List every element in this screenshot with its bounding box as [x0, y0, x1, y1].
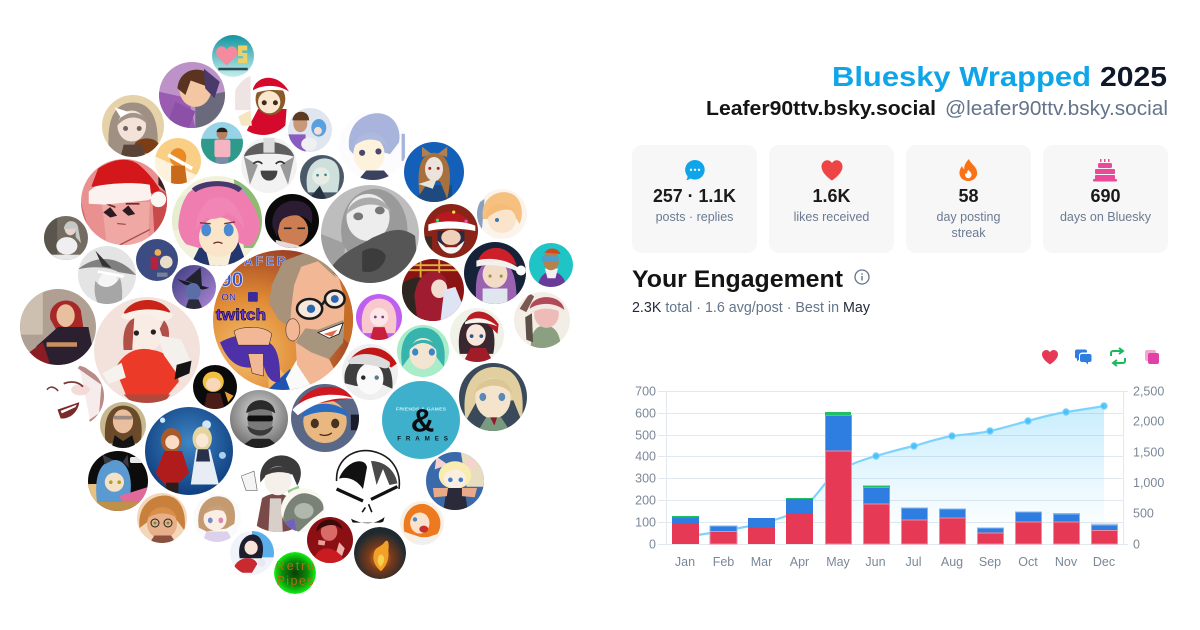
left axis labels: 500	[635, 428, 656, 442]
avatar: santa with bottle	[514, 292, 570, 348]
legend icons	[1042, 348, 1159, 366]
bar: Dec	[1091, 524, 1118, 544]
avatar: man in sunglasses	[230, 390, 288, 448]
bar: Aug	[940, 509, 966, 544]
right axis labels: 1,000	[1133, 476, 1164, 490]
avatar: santa girl with brown hair	[235, 76, 289, 135]
bar: Jul	[902, 508, 928, 544]
avatar: large greyscale girl	[321, 185, 419, 283]
avatar: santa girl dark hair	[450, 308, 504, 362]
avatar: wolf girl on blue	[404, 142, 464, 202]
avatar: retro pipes logo: Retro	[276, 559, 314, 573]
bar: Apr	[786, 498, 813, 544]
display name and handle	[706, 98, 1168, 120]
stat card: streak: 58	[958, 186, 979, 206]
avatar: grey witch sketch	[78, 246, 136, 304]
stat card: likes: 1.6K	[812, 186, 851, 206]
left axis labels: 700	[635, 384, 656, 398]
month labels: Oct	[1018, 555, 1038, 569]
avatar: white dress figure	[44, 216, 88, 260]
month labels: Jun	[865, 555, 886, 569]
month labels	[675, 555, 1115, 569]
avatar: red hands portrait	[307, 517, 353, 563]
avatar: blue hair cat girl	[88, 451, 148, 511]
avatar: pink hair girl	[172, 176, 262, 266]
avatar: chibi blonde	[193, 365, 237, 409]
avatar cluster	[20, 35, 573, 594]
left axis labels: 100	[635, 516, 656, 530]
avatar: hand raised sketch boy	[238, 452, 318, 532]
icon: legend heart	[1042, 350, 1058, 364]
avatar: dark red hair woman	[20, 289, 96, 365]
month labels: Jul	[906, 555, 921, 569]
avatar: friends frames logo	[382, 381, 460, 459]
stat card: days on Bluesky: 690	[1090, 186, 1121, 206]
right axis labels: 0	[1133, 538, 1140, 552]
bar: May	[825, 412, 852, 544]
stacked bars	[672, 412, 1118, 544]
cumulative points	[873, 403, 1107, 459]
avatar: retro pipes logo: Pipes	[277, 574, 313, 588]
stat card: likes: likes received	[794, 210, 869, 224]
avatar: santa hat redhead	[81, 159, 167, 245]
bar: Nov	[1053, 513, 1080, 544]
icon: legend replies	[1075, 350, 1092, 364]
icon: heart	[822, 160, 842, 180]
avatar: periwinkle hair	[348, 113, 405, 180]
left axis labels: 400	[635, 450, 656, 464]
avatar: santa cartoon with headset	[291, 384, 359, 452]
month labels: May	[826, 555, 851, 569]
avatar: friends frames logo: FRIENDS & GAMES	[396, 407, 447, 413]
avatar: friends frames logo: &	[411, 402, 434, 439]
avatar text: twitch banner: ON	[221, 292, 236, 303]
avatar: santa hat purple hair	[464, 242, 526, 304]
icon: birthday cake	[1093, 159, 1117, 182]
avatar: santa with lights	[424, 204, 478, 258]
month labels: Aug	[941, 555, 963, 569]
avatar: black and white sketch face	[336, 450, 400, 524]
display name and handle: @leafer90ttv.bsky.social	[945, 98, 1168, 120]
avatar: blonde elf	[477, 189, 527, 239]
icon: legend reposts	[1111, 348, 1125, 366]
avatar text: twitch banner: 90	[220, 268, 243, 291]
avatar: orange anime	[155, 138, 201, 184]
right axis labels: 500	[1133, 506, 1154, 520]
bar: Mar	[748, 518, 775, 544]
month labels: Mar	[751, 555, 772, 569]
title	[832, 61, 1167, 92]
avatar: teal background fox	[529, 243, 573, 287]
avatar: man at the sea	[201, 122, 243, 164]
avatar: red hair couple	[402, 259, 464, 321]
avatar: dark hair portrait	[265, 194, 319, 248]
right axis labels: 1,500	[1133, 446, 1164, 460]
stat card: posts and replies: posts · replies	[656, 210, 733, 224]
avatar: blonde cat boy	[426, 452, 484, 510]
icon: info	[855, 270, 869, 284]
avatar: teal hair girl	[397, 325, 449, 377]
icon: chat bubble	[685, 160, 705, 180]
avatar: pink hair on purple	[356, 294, 402, 340]
stat card: posts and replies: 257 · 1.1K	[653, 186, 736, 206]
avatar text: twitch banner	[216, 254, 286, 324]
avatar text: twitch banner: twitch	[216, 306, 266, 324]
stat card: posts and replies	[632, 145, 757, 253]
avatar: winter duo	[145, 407, 233, 495]
area under cumulative line	[685, 406, 1104, 544]
avatar: red black hair girl	[230, 531, 274, 575]
bar: Oct	[1016, 512, 1042, 544]
bar: Feb	[710, 526, 737, 544]
avatar: gray elf with green outline	[281, 488, 325, 532]
icon: flame	[959, 159, 977, 181]
avatar: pale hair	[300, 155, 344, 199]
left axis labels: 0	[649, 538, 656, 552]
month labels: Jan	[675, 555, 695, 569]
chart grid	[658, 391, 1128, 544]
avatar: woman with glasses	[100, 402, 146, 448]
cumulative line	[685, 406, 1104, 537]
bar: Sep	[978, 528, 1004, 544]
avatar: orange hair cookie girl	[400, 501, 444, 545]
icon: legend quotes	[1145, 350, 1159, 364]
avatar: blonde big portrait	[459, 363, 527, 431]
stat card: streak: streak	[951, 226, 986, 240]
stat card: days on Bluesky	[1043, 145, 1168, 253]
avatar: Leafer twitch portrait	[213, 250, 353, 390]
left axis labels	[635, 384, 656, 552]
stat card: likes	[769, 145, 894, 253]
stat card: streak: day posting	[937, 210, 1001, 224]
avatar: laughing grey helmet	[241, 137, 297, 193]
avatar: glasses brown hair	[137, 493, 187, 543]
title: 2025	[1100, 61, 1167, 92]
title: Bluesky Wrapped	[832, 61, 1091, 92]
avatar: brown hair girl	[193, 494, 241, 542]
heading: your engagement: Your Engagement	[632, 266, 843, 293]
month labels: Nov	[1055, 555, 1078, 569]
left axis labels: 600	[635, 406, 656, 420]
chart: monthly engagement	[635, 384, 1164, 569]
month labels: Feb	[713, 555, 734, 569]
right axis labels: 2,500	[1133, 384, 1164, 398]
month labels: Sep	[979, 555, 1001, 569]
avatar: blue witch	[172, 265, 216, 309]
avatar: santa bw girl	[342, 344, 398, 400]
left axis labels: 200	[635, 494, 656, 508]
avatar: retro pipes logo	[274, 552, 316, 594]
bar: Jun	[863, 485, 890, 544]
avatar: small blue scene	[136, 239, 178, 281]
avatar: bw laughing manga	[46, 366, 104, 422]
engagement summary: 2.3K total · 1.6 avg/post · Best in May	[632, 300, 871, 316]
avatar text: twitch banner: AFER	[244, 254, 286, 268]
stat card: days on Bluesky: days on Bluesky	[1060, 210, 1152, 224]
avatar: teal heart logo	[212, 35, 254, 77]
right axis labels	[1133, 384, 1164, 552]
avatar: cat ears trio	[288, 108, 332, 152]
right axis labels: 2,000	[1133, 414, 1164, 428]
display name and handle: Leafer90ttv.bsky.social	[706, 98, 936, 120]
avatar: purple embrace	[159, 62, 225, 128]
month labels: Apr	[790, 555, 809, 569]
left axis labels: 300	[635, 472, 656, 486]
bar: Jan	[672, 516, 699, 544]
avatar: violin girl	[102, 95, 164, 157]
avatar: friends frames logo: FRAMES	[397, 435, 448, 442]
month labels: Dec	[1093, 555, 1115, 569]
avatar: lava heart	[354, 527, 406, 579]
stat card: streak	[906, 145, 1031, 253]
avatar: red coat santa girl	[94, 297, 200, 403]
